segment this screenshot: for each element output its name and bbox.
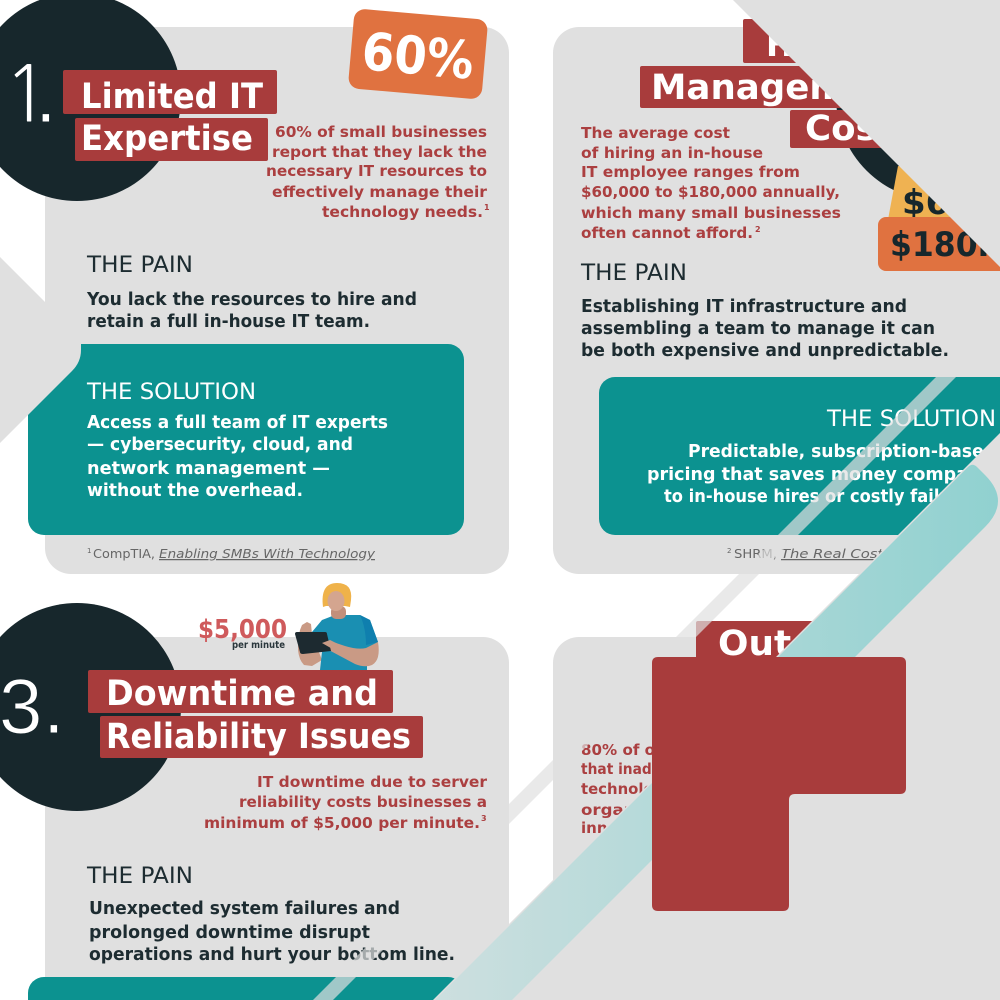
footnote 1: 1 <box>87 547 91 555</box>
footnote 1 <box>87 546 376 561</box>
the pain 3: operations and hurt your bottom line. <box>89 945 455 965</box>
the solution 2: Predictable, subscription-based <box>688 442 996 462</box>
statistic text 4 <box>581 741 761 837</box>
overlay: red L-shaped block <box>652 657 906 911</box>
statistic text 4: technology <box>581 780 674 798</box>
the pain 1: You lack the resources to hire and <box>86 290 417 310</box>
statistic text 2: $60,000 to $180,000 annually, <box>581 183 840 201</box>
title: Downtime and Reliability Issues: Downtime and <box>106 674 378 714</box>
overlay: translucent thin diagonal stripe <box>313 313 1000 1000</box>
number circle 1 <box>0 0 181 201</box>
statistic text 2: 2 <box>755 225 761 234</box>
title: Limited IT Expertise <box>63 70 277 161</box>
number circle 3: . <box>43 662 65 750</box>
statistic text 1 <box>266 123 490 221</box>
the solution 1 <box>28 344 464 535</box>
statistic text 3 <box>204 773 487 832</box>
number circle 1: . <box>35 51 57 139</box>
statistic text 2: of hiring an in-house <box>581 144 763 162</box>
overlay: top right gray triangle <box>733 0 1000 267</box>
statistic text 1: 1 <box>484 203 490 212</box>
badge: $60K: $60K <box>902 183 1000 223</box>
the pain 2: THE PAIN <box>580 260 687 286</box>
statistic text 3: minimum of $5,000 per minute. <box>204 814 480 832</box>
the pain 2 <box>580 260 949 361</box>
overlay: bottom right gray triangle <box>433 433 1000 1000</box>
statistic text 4: 80% of organizations <box>581 741 761 759</box>
badge: $180K <box>878 217 1000 271</box>
statistic text 2 <box>581 124 841 242</box>
callout: $5,000 per minute: $5,000 <box>198 615 287 645</box>
the pain 1 <box>86 252 417 332</box>
callout: $5,000 per minute: per minute <box>232 640 285 651</box>
statistic text 1: 60% of small businesses <box>275 123 487 141</box>
the solution 2: pricing that saves money compared <box>647 465 1000 485</box>
panel 3: downtime and reliability issues <box>0 583 509 1000</box>
the pain 2: Establishing IT infrastructure and <box>581 297 907 317</box>
number circle 3: 3 <box>0 662 42 750</box>
the pain 1: retain a full in-house IT team. <box>87 312 370 332</box>
the solution 2 <box>599 377 1000 535</box>
number circle 2 <box>836 0 1000 201</box>
overlay: light teal diagonal band <box>400 465 998 1000</box>
footnote 2 <box>727 546 951 561</box>
the pain 2: assembling a team to manage it can <box>581 319 935 339</box>
the solution 1: without the overhead. <box>87 481 303 501</box>
the solution 1: network management — <box>87 459 330 479</box>
overlay: left gray shape <box>0 257 81 443</box>
statistic text 1: technology needs. <box>322 203 483 221</box>
title: Outdated: Outdated <box>718 624 908 664</box>
footnote 2: The Real Cost of Hiring <box>781 546 951 561</box>
footnote 1: Enabling SMBs With Technology <box>159 546 376 561</box>
statistic text 2: IT employee ranges from <box>581 163 800 181</box>
the pain 3 <box>86 863 455 965</box>
title: High IT Management Costs: Management <box>651 68 913 108</box>
the pain 3: prolonged downtime disrupt <box>89 923 370 943</box>
the pain 3: Unexpected system failures and <box>89 899 400 919</box>
statistic text 4: that inadequate <box>581 760 706 778</box>
panel 2: high IT management costs <box>553 0 1000 574</box>
statistic text 3: 3 <box>481 814 487 823</box>
the solution 2: to in-house hires or costly failures. <box>664 487 986 507</box>
footnote 2: SHRM, <box>734 546 777 561</box>
title: High IT Management Costs: Costs <box>805 109 915 149</box>
panel 4: outdated technology <box>553 621 1000 1000</box>
title: Limited IT Expertise: Limited IT <box>81 77 263 117</box>
the pain 1: THE PAIN <box>86 252 193 278</box>
number circle 1: 1 <box>3 56 50 134</box>
icon: person with tablet <box>295 583 379 670</box>
statistic text 1: necessary IT resources to <box>266 162 487 180</box>
the solution 2: THE SOLUTION <box>826 406 996 432</box>
the pain 3: THE PAIN <box>86 863 193 889</box>
statistic text 2: often cannot afford. <box>581 224 753 242</box>
statistic text 4: organization <box>581 801 699 819</box>
title: High IT Management Costs <box>640 19 943 149</box>
title: Downtime and Reliability Issues: Reliability Issues <box>106 717 411 757</box>
the solution 1: Access a full team of IT experts <box>87 413 388 433</box>
title: High IT Management Costs: High IT <box>766 25 896 65</box>
number circle 3 <box>0 603 181 811</box>
footnote 2: 2 <box>727 547 731 555</box>
statistic text 3: reliability costs businesses a <box>239 793 487 811</box>
title: Downtime and Reliability Issues <box>88 670 423 758</box>
panel 1: limited IT expertise <box>0 0 509 574</box>
the solution 1: THE SOLUTION <box>86 379 256 405</box>
the solution 1: — cybersecurity, cloud, and <box>87 435 353 455</box>
footnote 1: CompTIA, <box>93 546 155 561</box>
statistic text 2: which many small businesses <box>581 204 841 222</box>
statistic text 4: innovation <box>581 819 671 837</box>
badge: 60%: 60% <box>359 22 476 92</box>
statistic text 1: effectively manage their <box>272 183 487 201</box>
title: Limited IT Expertise: Expertise <box>81 119 253 159</box>
the pain 2: be both expensive and unpredictable. <box>581 341 949 361</box>
title: Outdated <box>696 621 908 671</box>
statistic text 3: IT downtime due to server <box>257 773 487 791</box>
statistic text 1: report that they lack the <box>272 143 487 161</box>
badge: $60K <box>887 166 1000 225</box>
the solution 3 <box>28 977 464 1000</box>
statistic text 2: The average cost <box>581 124 731 142</box>
